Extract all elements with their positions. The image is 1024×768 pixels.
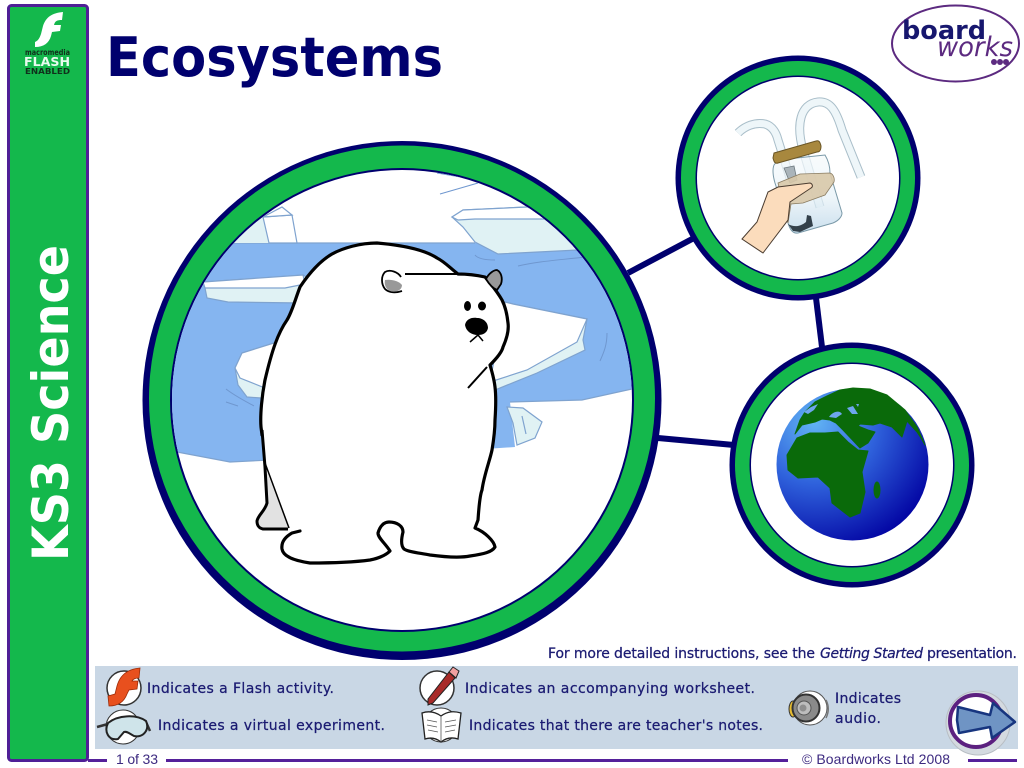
icy background	[150, 173, 650, 462]
legend: flash text: Indicates a Flash activity.	[147, 681, 334, 697]
boardworks logo: board	[902, 16, 986, 46]
next arrow button	[946, 691, 1015, 755]
tube stopper	[784, 166, 797, 183]
sidebar title: KS3 Science	[22, 245, 80, 561]
main circle: polar bear scene	[142, 141, 662, 660]
legend: goggles icon	[97, 710, 150, 744]
instructions note: For more detailed instructions, see the	[548, 646, 815, 662]
back leg outline	[257, 430, 289, 529]
legend: pencil icon	[420, 667, 459, 705]
legend panel	[95, 666, 1018, 749]
legend: speaker icon	[789, 691, 828, 725]
page number: 1 of 33	[116, 751, 158, 767]
instructions note: Getting Started	[820, 646, 923, 662]
madagascar	[874, 482, 880, 498]
legend: audio text: Indicates	[835, 691, 901, 707]
body fill	[261, 243, 508, 563]
creatures	[788, 215, 813, 232]
face	[464, 301, 488, 342]
glass tubes	[738, 102, 861, 207]
flash enabled badge: macromedia	[25, 48, 70, 57]
africa	[787, 432, 868, 517]
sidebar panel	[8, 6, 88, 760]
fingers over jar	[778, 173, 834, 223]
legend: worksheet text: Indicates an accompanying worksheet.	[465, 681, 755, 697]
legend: book icon	[422, 708, 461, 742]
top right iceberg	[450, 206, 576, 254]
head line	[405, 273, 458, 275]
legend: audio text: audio.	[835, 711, 881, 727]
flash enabled badge: ENABLED	[25, 67, 70, 76]
title: Ecosystems	[106, 26, 443, 89]
body outline	[261, 243, 508, 563]
near ear	[382, 271, 402, 292]
boardworks logo: works	[937, 32, 1013, 63]
middle ice floe	[234, 342, 274, 398]
legend: notes text: Indicates that there are teacher's notes.	[469, 718, 763, 734]
globe	[776, 388, 928, 540]
flash enabled badge	[24, 12, 70, 76]
top small circle: jar experiment	[676, 56, 920, 300]
top left iceberg	[225, 207, 297, 243]
left ice floe	[203, 275, 320, 303]
boardworks logo	[892, 6, 1019, 82]
footer	[88, 751, 1017, 767]
legend: flash icon	[107, 668, 141, 706]
lid	[773, 141, 821, 163]
instructions note: presentation.	[927, 646, 1017, 662]
right ice floe	[490, 302, 587, 392]
legend: experiment text: Indicates a virtual experiment.	[158, 718, 385, 734]
bottom small circle: globe	[730, 342, 974, 588]
instructions note	[548, 646, 1017, 662]
legend: audio text	[835, 691, 901, 727]
connector lines	[628, 238, 822, 445]
water ripples	[226, 173, 607, 406]
far ear	[486, 270, 502, 290]
small ice floe	[507, 407, 542, 445]
back leg	[257, 440, 288, 529]
flash enabled badge: FLASH	[24, 55, 70, 69]
hand	[742, 183, 812, 253]
water	[150, 243, 650, 462]
jar	[773, 155, 842, 233]
arm line	[468, 367, 487, 388]
eurasia	[795, 388, 925, 448]
seas	[804, 404, 859, 418]
copyright: © Boardworks Ltd 2008	[802, 751, 950, 767]
polar bear	[257, 243, 508, 563]
